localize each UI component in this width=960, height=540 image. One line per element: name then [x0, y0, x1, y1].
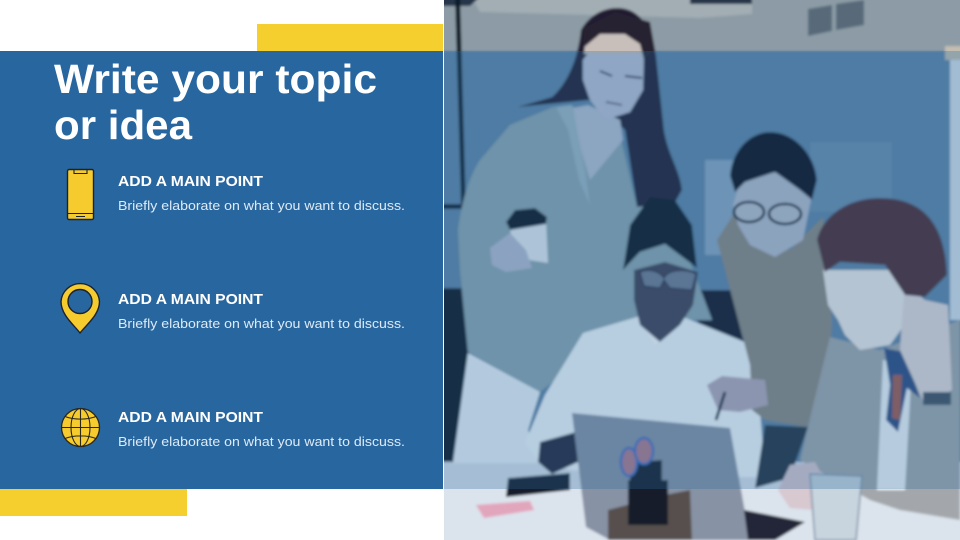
glass: [810, 474, 862, 540]
photo: four women around a laptop: [440, 0, 960, 540]
laptop base: [744, 510, 805, 540]
woman 1 neck and collar opening: [573, 105, 623, 180]
yellow bar top: [257, 24, 443, 51]
woman 2 shirt: [525, 317, 765, 477]
woman 2 neck and face: [634, 262, 698, 342]
whiteboard: [704, 159, 737, 256]
scissors handles: [621, 438, 653, 476]
woman 3 sweater: [717, 212, 832, 427]
main point 2: [118, 291, 405, 331]
desk: [440, 462, 960, 540]
woman 2 hair: [623, 197, 697, 270]
panel background: [0, 51, 443, 489]
panel: main points: [0, 51, 443, 489]
woman 4 white shirt: [877, 360, 912, 490]
white trousers: [453, 353, 540, 463]
photo background wall: [444, 0, 960, 540]
woman 4 hair: [817, 198, 947, 297]
main point 1: Briefly elaborate on what you want to discuss.: [118, 198, 405, 213]
woman 1 shirt: [458, 107, 712, 392]
laptop: [572, 413, 750, 540]
woman 2 glasses: [640, 270, 696, 290]
woman 4 face: [823, 270, 908, 350]
wall vent: [808, 0, 864, 36]
main point 3: Briefly elaborate on what you want to discuss.: [118, 434, 405, 449]
woman 2 hand: [538, 432, 578, 474]
woman 1 hair back: [518, 8, 682, 208]
main point 2: Briefly elaborate on what you want to discuss.: [118, 316, 405, 331]
title: Write your topic: [54, 56, 377, 102]
title: [54, 56, 377, 148]
main point 1: [118, 173, 405, 213]
main point 2: ADD A MAIN POINT: [118, 291, 263, 308]
woman 4 hand: [900, 285, 952, 405]
pen holder: [608, 490, 692, 540]
main point 3: [118, 409, 405, 449]
icon: location pin: [61, 284, 100, 333]
coffee cup: [509, 220, 548, 263]
sticky note: [476, 501, 534, 518]
woman 4 tie: [884, 348, 920, 432]
woman 3 glasses: [734, 202, 801, 224]
woman 1 face: [580, 52, 646, 118]
woman 4 jacket: [800, 320, 960, 520]
woman 3 hair: [730, 132, 817, 200]
woman 3 face: [733, 172, 812, 257]
main point 3: ADD A MAIN POINT: [118, 409, 263, 426]
woman 3 dark trousers: [755, 425, 808, 488]
icon: globe: [62, 408, 100, 446]
blue tint band over photo: [444, 51, 960, 489]
dark lower-left corner: [444, 286, 470, 463]
yellow bar bottom: [0, 489, 187, 516]
right wall strip: [950, 60, 960, 320]
icon: smartphone: [68, 170, 94, 220]
woman 1 hand: [490, 233, 532, 272]
black frame on wall: [444, 0, 467, 210]
calculator: [506, 473, 570, 497]
title: or idea: [54, 102, 193, 148]
main point 1: ADD A MAIN POINT: [118, 173, 263, 190]
woman 4 watch: [923, 392, 951, 405]
woman 4 left hand: [778, 461, 820, 510]
woman 3 hand and pen: [707, 376, 768, 412]
woman 1 hair front: [582, 19, 654, 58]
